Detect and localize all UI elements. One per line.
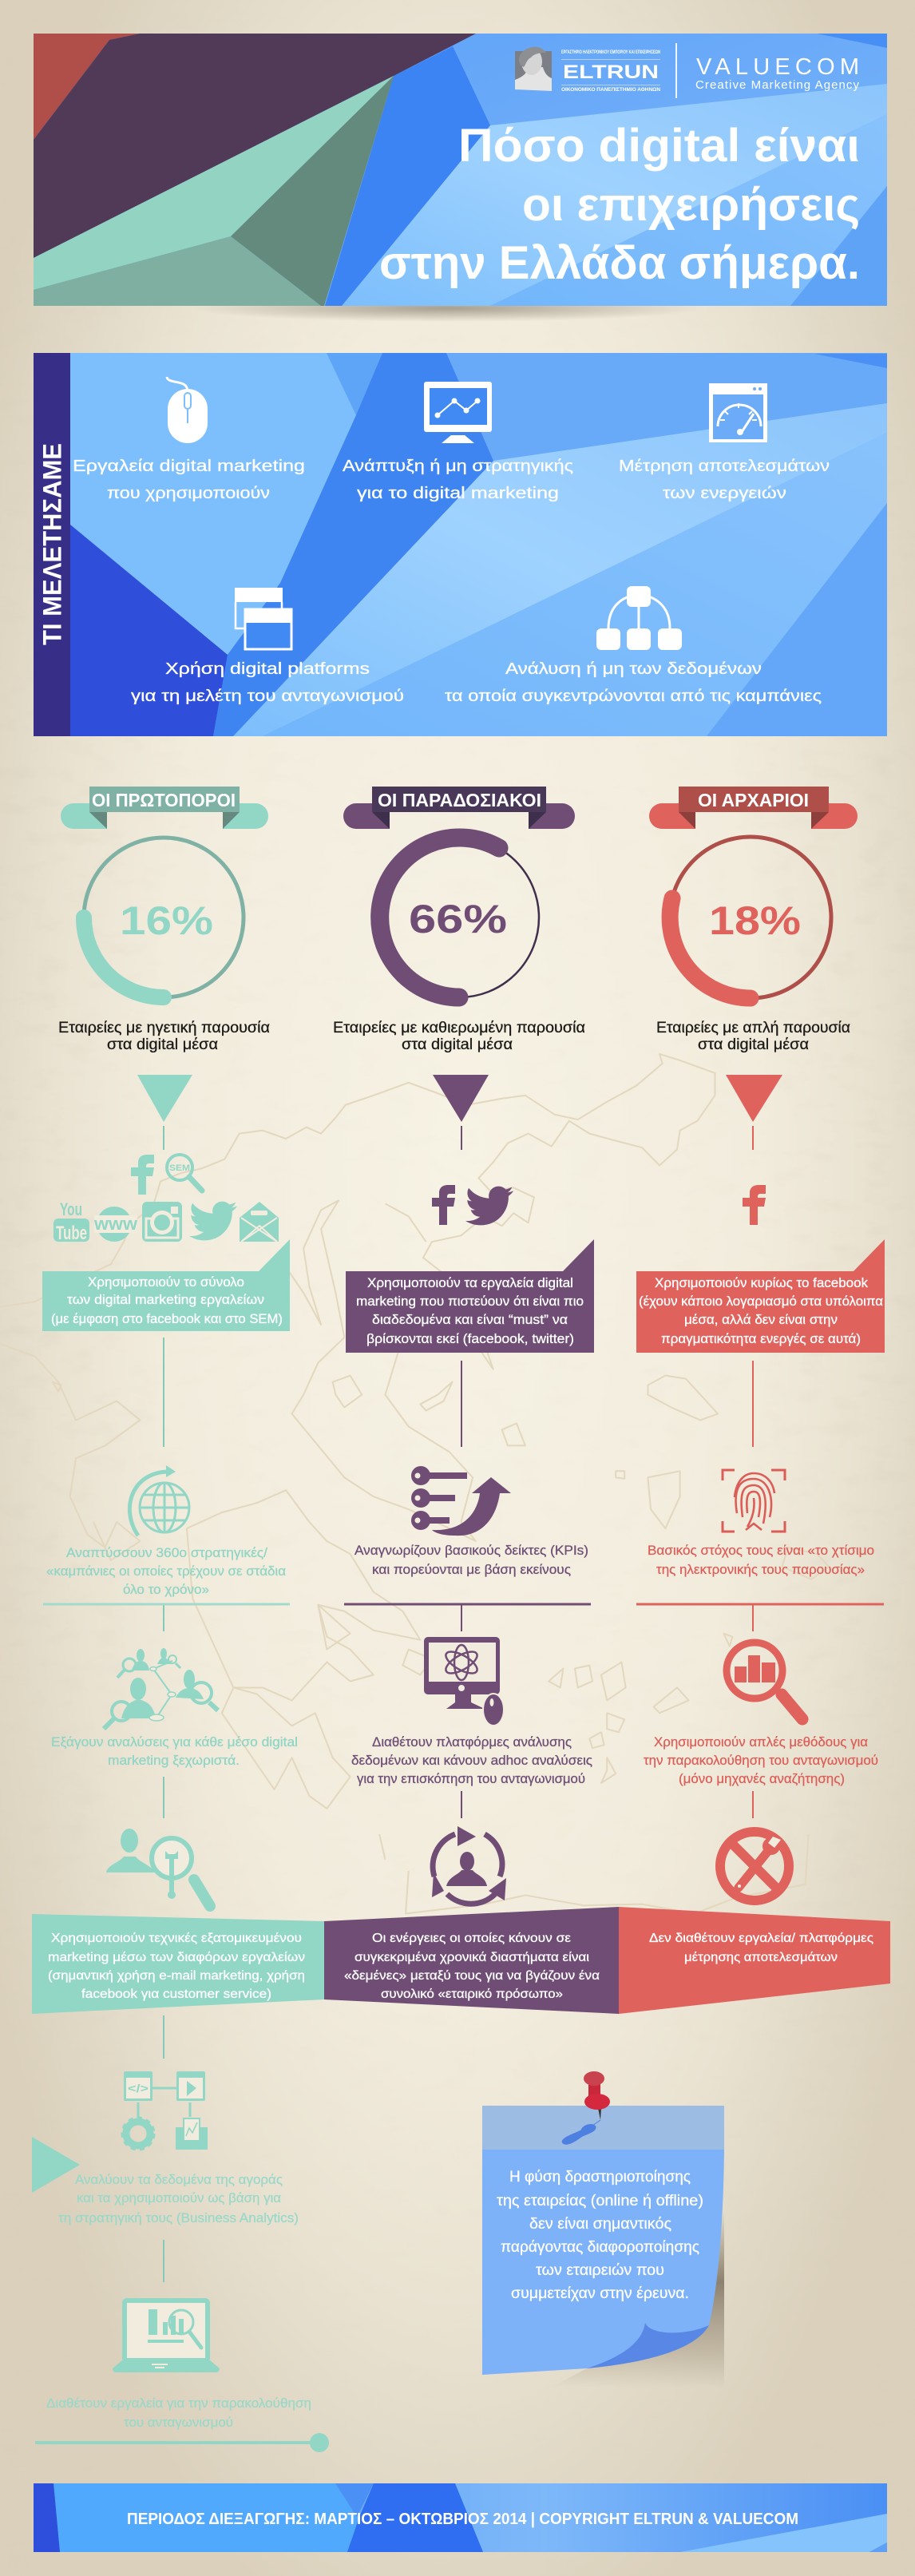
donut: 16%: 16% <box>120 898 213 943</box>
icon: people network <box>104 1648 218 1729</box>
title <box>379 120 860 289</box>
icon: YouTube <box>53 1199 89 1244</box>
ribbon: beginners <box>649 787 858 829</box>
competition tools text: Διαθέτουν εργαλεία για την παρακολούθηση <box>46 2396 311 2411</box>
KPI text: Αναγνωρίζουν βασικούς δείκτες (KPIs) <box>355 1543 588 1558</box>
icon: monitor with atom <box>424 1637 504 1726</box>
column: beginners header <box>649 787 858 1053</box>
callout: traditional tools: Χρησιμοποιούν τα εργαλεία digital <box>367 1275 573 1290</box>
icon: YouTube: Tube <box>56 1223 87 1244</box>
methods text: (μόνο μηχανές αναζήτησης) <box>679 1771 845 1786</box>
band: traditional: Οι ενέργειες οι οποίες κάνουν σε <box>372 1932 571 1945</box>
methods text: την παρακολούθηση του ανταγωνισμού <box>644 1753 878 1768</box>
footer facets <box>34 2483 887 2552</box>
arrow: beginners <box>726 1075 782 1122</box>
column: pioneers header <box>58 787 270 1053</box>
callout: traditional tools: διαδεδομένα και είναι “must” να <box>372 1312 568 1327</box>
icon: mouse <box>167 377 208 443</box>
icon: instagram <box>142 1202 182 1242</box>
icon: twitter <box>189 1202 237 1240</box>
arrow: pioneers <box>137 1075 192 1122</box>
arrow: traditional <box>433 1075 489 1122</box>
timeline end <box>35 2433 329 2452</box>
icon: person with cycle arrows <box>432 1826 506 1904</box>
icon: ELTRUN bust <box>515 47 552 91</box>
label: platforms: Χρήση digital platforms <box>165 660 370 678</box>
icon: magnifier with bars <box>727 1643 802 1719</box>
title: στην Ελλάδα σήμερα. <box>379 237 860 289</box>
goal text: της ηλεκτρονικής τους παρουσίας» <box>656 1562 865 1577</box>
analyses text: marketing ξεχωριστά. <box>108 1753 240 1768</box>
callout: pioneers tools: Χρησιμοποιούν το σύνολο <box>88 1274 244 1290</box>
ribbon: traditional <box>343 787 575 829</box>
icon: gauge window <box>709 383 767 442</box>
icons: teal social media <box>53 1155 279 1244</box>
note text: παράγοντας διαφοροποίησης <box>501 2239 699 2256</box>
label: data analysis: τα οποία συγκεντρώνονται από τις καμπάνιες <box>445 688 822 705</box>
pin <box>584 2071 610 2120</box>
ribbon: traditional: ΟΙ ΠΑΡΑΔΟΣΙΑΚΟΙ <box>378 790 541 810</box>
icon: envelope <box>240 1202 279 1242</box>
ELTRUN wordmark <box>561 50 660 93</box>
icon: keys with arrow <box>411 1466 511 1536</box>
strategy text: Αναπτύσσουν 360ο στρατηγικές/ <box>66 1545 267 1560</box>
connector lines <box>164 1126 753 2282</box>
note text: Η φύση δραστηριοποίησης <box>509 2169 691 2186</box>
callout: beginners tools: μέσα, αλλά δεν είναι στην <box>684 1312 838 1327</box>
VALUECOM wordmark <box>695 54 859 92</box>
pin shadow <box>562 2120 600 2144</box>
icon: monitor chart <box>424 382 492 443</box>
description: pioneers: Εταιρείες με ηγετική παρουσία <box>58 1020 270 1036</box>
label: tools <box>73 458 305 502</box>
label: platforms: για τη μελέτη του ανταγωνισμού <box>131 688 404 705</box>
callout: pioneers tools: των digital marketing εργαλείων <box>67 1292 264 1307</box>
donut: 18% <box>670 837 831 998</box>
VALUECOM wordmark: VALUECOM <box>696 54 859 80</box>
note body <box>482 2150 724 2375</box>
arrow: side triangle <box>32 2137 80 2193</box>
platforms text: Διαθέτουν πλατφόρμες ανάλυσης <box>372 1734 572 1750</box>
panel: what we studied <box>34 353 887 736</box>
label: data analysis <box>445 660 822 705</box>
donut: 66%: 66% <box>409 897 507 941</box>
label: measurement: Μέτρηση αποτελεσμάτων <box>619 458 830 475</box>
note text <box>497 2169 703 2302</box>
band: traditional: συνολικό «εταιρικό πρόσωπο» <box>381 1987 563 2001</box>
description: traditional: Εταιρείες με καθιερωμένη παρουσία <box>333 1020 585 1036</box>
sticky note <box>482 2071 724 2388</box>
callout: pioneers tools <box>42 1239 290 1331</box>
analyses text <box>51 1734 298 1768</box>
icon: fingerprint <box>723 1470 785 1532</box>
note text: συμμετείχαν στην έρευνα. <box>511 2285 689 2302</box>
goal text <box>648 1543 874 1577</box>
description: traditional <box>333 1020 585 1053</box>
description: beginners: Εταιρείες με απλή παρουσία <box>656 1020 850 1036</box>
KPI text <box>355 1543 588 1577</box>
icon: person and wrench magnifier <box>106 1829 210 1906</box>
platforms text <box>351 1734 592 1786</box>
strategy text: «καμπάνιες οι οποίες τρέχουν σε στάδια <box>46 1563 286 1579</box>
ribbon: pioneers <box>61 787 268 829</box>
donut: 16% <box>84 838 244 997</box>
label: strategy: για το digital marketing <box>357 485 559 502</box>
icon: globe with arrow <box>129 1465 189 1536</box>
analyses text: Εξάγουν αναλύσεις για κάθε μέσο digital <box>51 1734 298 1750</box>
icon: SEM magnifier <box>167 1155 202 1191</box>
KPI text: και πορεύονται με βάση εκείνους <box>372 1562 571 1577</box>
strategy text: όλο το χρόνο» <box>123 1582 209 1597</box>
description: pioneers: στα digital μέσα <box>107 1036 218 1053</box>
note text: των εταιρειών που <box>536 2262 664 2279</box>
icon: business analytics flow <box>123 2071 208 2150</box>
header shadow <box>192 295 703 322</box>
icon: business analytics flow: </> <box>128 2082 149 2094</box>
background map of Greece <box>0 1054 829 1914</box>
callout: pioneers tools: (με έμφαση στο facebook και στο SEM) <box>51 1311 283 1326</box>
ELTRUN wordmark: ΕΡΓΑΣΤΗΡΙΟ ΗΛΕΚΤΡΟΝΙΚΟΥ ΕΜΠΟΡΙΟΥ ΚΑΙ ΕΠΙΧΕΙΡΗΣΕΩΝ <box>561 50 660 55</box>
icon: red facebook <box>743 1185 766 1225</box>
competition tools text: του ανταγωνισμού <box>124 2415 233 2430</box>
methods text: Χρησιμοποιούν απλές μεθόδους για <box>654 1734 868 1750</box>
icon: SEM magnifier: SEM <box>169 1163 190 1173</box>
label: platforms <box>131 660 404 705</box>
ribbon: pioneers: ΟΙ ΠΡΩΤΟΠΟΡΟΙ <box>92 790 236 810</box>
description: pioneers <box>58 1020 270 1053</box>
footer text: ΠΕΡΙΟΔΟΣ ΔΙΕΞΑΓΩΓΗΣ: ΜΑΡΤΙΟΣ – ΟΚΤΩΒΡΙΟΣ 2014 | COPYRIGHT ELTRUN & VALUECOM <box>127 2511 798 2528</box>
label: strategy: Ανάπτυξη ή μη στρατηγικής <box>343 458 573 475</box>
icon: YouTube: You <box>60 1199 82 1219</box>
band: traditional: συγκεκριμένα χρονικά διαστήματα είναι <box>355 1951 589 1964</box>
label: strategy <box>343 458 573 502</box>
band: traditional: «δεμένες» μεταξύ τους για να βγάζουν ένα <box>344 1969 600 1983</box>
VALUECOM wordmark: Creative Marketing Agency <box>695 78 859 92</box>
competition tools text <box>46 2396 311 2430</box>
strategy text <box>46 1545 286 1597</box>
business analytics text: Αναλύουν τα δεδομένα της αγοράς <box>75 2172 283 2187</box>
panel facets <box>70 353 887 736</box>
icon: hierarchy <box>596 586 682 650</box>
band: pioneers: facebook για customer service) <box>81 1987 271 2001</box>
label: tools: που χρησιμοποιούν <box>107 485 270 502</box>
callout: beginners tools: (έχουν κάποιο λογαριασμό στα υπόλοιπα <box>639 1294 883 1309</box>
icon: purple twitter <box>465 1187 513 1225</box>
band: pioneers: (σημαντική χρήση e-mail marketing, χρήση <box>48 1969 305 1983</box>
icon: laptop analytics <box>113 2301 220 2372</box>
methods text <box>644 1734 878 1786</box>
description: beginners: στα digital μέσα <box>698 1036 809 1053</box>
icon: www: www <box>93 1214 138 1234</box>
header banner <box>34 34 887 306</box>
note curl <box>587 2323 709 2368</box>
footer <box>34 2483 887 2552</box>
ELTRUN wordmark: ELTRUN <box>563 61 659 83</box>
label: data analysis: Ανάλυση ή μη των δεδομένων <box>505 660 762 678</box>
icon: facebook <box>131 1155 154 1195</box>
note strip <box>482 2106 724 2150</box>
note text: δεν είναι σημαντικός <box>529 2216 671 2233</box>
callout: traditional tools <box>346 1239 594 1353</box>
business analytics text: και τα χρησιμοποιούν ως βάση για <box>77 2190 281 2205</box>
platforms text: δεδομένων και κάνουν adhoc αναλύσεις <box>351 1753 592 1768</box>
donut: 66% <box>379 838 539 997</box>
band: pioneers <box>32 1914 324 2014</box>
ribbon: beginners: ΟΙ ΑΡΧΑΡΙΟΙ <box>698 790 809 810</box>
logos <box>515 43 859 98</box>
callout: traditional tools: marketing που πιστεύουν ότι είναι πιο <box>356 1294 584 1309</box>
callout: beginners tools <box>636 1239 885 1353</box>
business analytics text <box>58 2172 299 2225</box>
band: beginners: Δεν διαθέτουν εργαλεία/ πλατφόρμες <box>649 1932 873 1945</box>
callout: beginners tools: πραγματικότητα ενεργές σε αυτά) <box>661 1331 861 1346</box>
platforms text: για την επισκόπηση του ανταγωνισμού <box>357 1771 585 1786</box>
dividers <box>43 1603 884 1605</box>
side heading: ΤΙ ΜΕΛΕΤΗΣΑΜΕ <box>38 443 67 645</box>
callout: beginners tools: Χρησιμοποιούν κυρίως το facebook <box>655 1275 868 1290</box>
donut: 18%: 18% <box>709 898 801 943</box>
description: traditional: στα digital μέσα <box>402 1036 513 1053</box>
band: pioneers: Χρησιμοποιούν τεχνικές εξατομικευμένου <box>51 1932 302 1945</box>
column: traditional header <box>333 787 585 1053</box>
business analytics text: τη στρατηγική τους (Business Analytics) <box>58 2210 299 2225</box>
note text: της εταιρείας (online ή offline) <box>497 2193 703 2209</box>
title: Πόσο digital είναι <box>458 120 860 172</box>
header dark facets <box>34 34 476 306</box>
goal text: Βασικός στόχος τους είναι «το χτίσιμο <box>648 1543 874 1558</box>
note shadow <box>551 2212 724 2388</box>
label: measurement <box>619 458 830 502</box>
icon: no tools <box>720 1832 789 1900</box>
label: tools: Εργαλεία digital marketing <box>73 458 305 475</box>
label: measurement: των ενεργειών <box>663 485 786 502</box>
description: beginners <box>656 1020 850 1053</box>
band: traditional <box>324 1907 619 2014</box>
icon: purple facebook <box>432 1185 455 1225</box>
icon: www <box>93 1207 138 1242</box>
ELTRUN wordmark: ΟΙΚΟΝΟΜΙΚΟ ΠΑΝΕΠΙΣΤΗΜΙΟ ΑΘΗΝΩΝ <box>561 87 660 93</box>
callout: traditional tools: βρίσκονται εκεί (facebook, twitter) <box>366 1331 574 1346</box>
band: pioneers: marketing μέσω των διαφόρων εργαλείων <box>48 1951 305 1964</box>
band: beginners <box>619 1907 890 2014</box>
icon: windows <box>235 588 292 649</box>
title: οι επιχειρήσεις <box>522 179 860 231</box>
band: beginners: μέτρησης αποτελεσμάτων <box>684 1951 838 1964</box>
header blue facets <box>34 34 887 306</box>
